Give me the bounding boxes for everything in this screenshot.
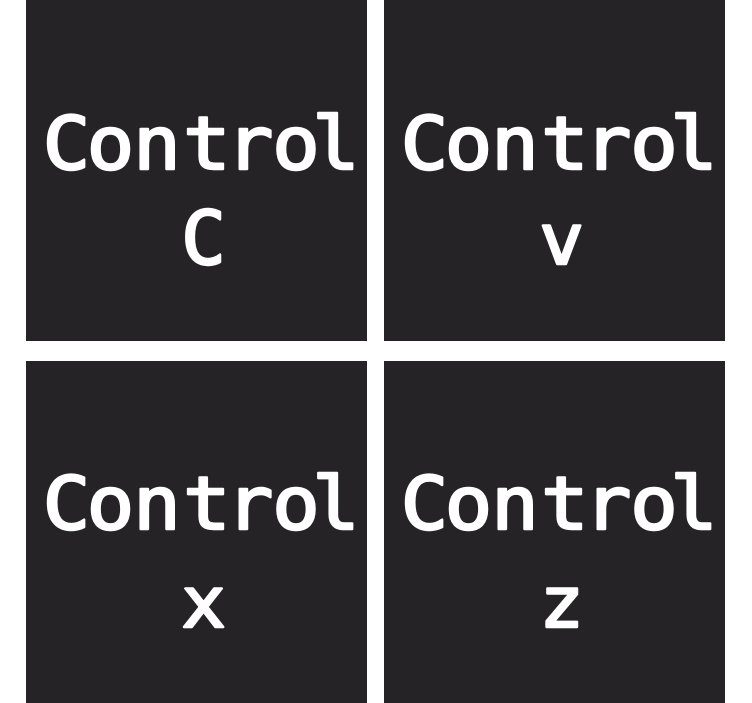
- label: x: x: [181, 563, 226, 644]
- label: C: C: [181, 196, 226, 282]
- label: Control: Control: [43, 101, 360, 186]
- label: Control: Control: [43, 461, 360, 546]
- label: v: v: [539, 200, 584, 281]
- panel: Control v: [384, 0, 725, 341]
- label: z: z: [539, 563, 584, 644]
- panel: Control C: [26, 0, 367, 341]
- panel: Control x: [26, 361, 367, 703]
- label: Control: Control: [401, 461, 718, 546]
- panel: Control z: [384, 361, 725, 703]
- label: Control: Control: [401, 101, 718, 186]
